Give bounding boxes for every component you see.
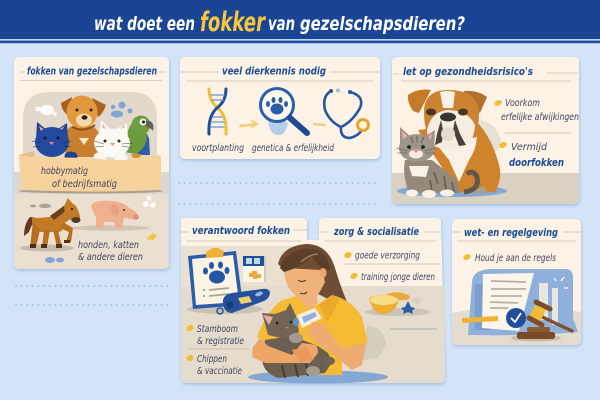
label: honden, katten en andere dieren	[78, 240, 143, 263]
bullet: training jonge dieren: training jonge dieren	[361, 272, 435, 283]
illustration: bulldog and cat	[396, 90, 507, 198]
heading: wet- en regelgeving	[464, 226, 558, 239]
bullet: vermijd doorfokken	[498, 141, 564, 169]
blue cat	[36, 122, 68, 140]
panel: verantwoord fokken en zorg en socialisatie	[181, 218, 451, 386]
bullet: vermijd doorfokken: Vermijd	[511, 142, 548, 153]
panel: wet- en regelgeving	[452, 219, 582, 346]
title	[94, 7, 465, 38]
heading: veel dierkennis nodig	[222, 64, 326, 78]
bullet: goede verzorging	[343, 250, 420, 262]
bottle	[297, 308, 322, 328]
arrow	[313, 124, 325, 125]
illustration: pets in a basket	[19, 92, 163, 194]
bullet: houd je aan de regels: Houd je aan de regels	[475, 253, 556, 264]
heading: fokken van gezelschapsdieren	[27, 64, 157, 78]
heading: zorg en socialisatie: zorg & socialisatie	[333, 225, 419, 238]
bullet: chippen en vaccinatie: Chippen	[197, 354, 227, 365]
grey cat body	[404, 160, 461, 193]
bullet: stamboom en registratie: Stamboom	[197, 324, 238, 335]
shirt	[257, 295, 368, 375]
bullet: voorkom erfelijke afwijkingen: Voorkom	[505, 98, 540, 109]
bullet: chippen en vaccinatie: & vaccinatie	[197, 366, 242, 377]
dotted separators	[16, 183, 380, 305]
bullet: vermijd doorfokken: doorfokken	[509, 156, 564, 169]
her near arm	[252, 338, 318, 363]
grey cat head	[400, 127, 435, 150]
heading: verantwoord fokken: verantwoord fokken	[192, 224, 290, 237]
label: hobbymatig of bedrijfsmatig: hobbymatig	[41, 166, 88, 177]
parrot	[136, 132, 150, 155]
arrow	[240, 120, 258, 128]
bullet: chippen en vaccinatie	[185, 354, 242, 377]
title: van	[268, 13, 295, 35]
title: fokker	[200, 7, 266, 38]
hair	[278, 244, 347, 302]
illustration: bowl and star	[365, 292, 437, 329]
her far arm	[307, 322, 366, 370]
bulldog body	[418, 122, 500, 192]
bullet: stamboom en registratie	[185, 324, 244, 347]
illustration: woman holding a kitten	[248, 244, 388, 384]
dog	[65, 126, 103, 157]
panel: fokken van gezelschapsdieren	[14, 57, 170, 270]
label: voortplanting: voortplanting	[192, 143, 244, 154]
bulldog head	[408, 90, 431, 113]
panel: let op gezondheidsrisico's	[392, 57, 582, 206]
icon: magnifier with paw	[260, 88, 307, 135]
white cat	[99, 120, 128, 138]
illustration: clipboard and chip reader	[187, 248, 270, 314]
bullet: goede verzorging: goede verzorging	[355, 250, 420, 262]
title: wat doet een	[94, 13, 195, 35]
icon: stethoscope	[324, 88, 368, 138]
label: hobbymatig of bedrijfsmatig	[41, 166, 117, 190]
bullet: stamboom en registratie: & registratie	[197, 336, 244, 347]
bullet: training jonge dieren	[349, 272, 435, 283]
label: genetica en erfelijkheid: genetica & erfelijkheid	[252, 143, 335, 154]
face	[284, 268, 325, 310]
label: hobbymatig of bedrijfsmatig: of bedrijfsmatig	[52, 179, 117, 190]
heading: let op gezondheidsrisico's	[403, 65, 533, 78]
bullet: voorkom erfelijke afwijkingen	[493, 98, 579, 123]
basket	[19, 188, 163, 194]
cat head	[262, 303, 299, 339]
icon: dna	[209, 89, 226, 134]
cat body	[262, 336, 332, 378]
title: gezelschapsdieren?	[300, 13, 465, 35]
header band	[0, 0, 600, 43]
bullet: voorkom erfelijke afwijkingen: erfelijke afwijkingen	[501, 112, 579, 123]
illustration: horse and pig	[20, 196, 157, 263]
label: honden, katten en andere dieren: honden, katten	[78, 240, 139, 251]
label: honden, katten en andere dieren: & andere dieren	[78, 252, 143, 263]
panel: veel dierkennis nodig	[180, 57, 380, 159]
illustration: document, check and gavel	[452, 269, 582, 346]
